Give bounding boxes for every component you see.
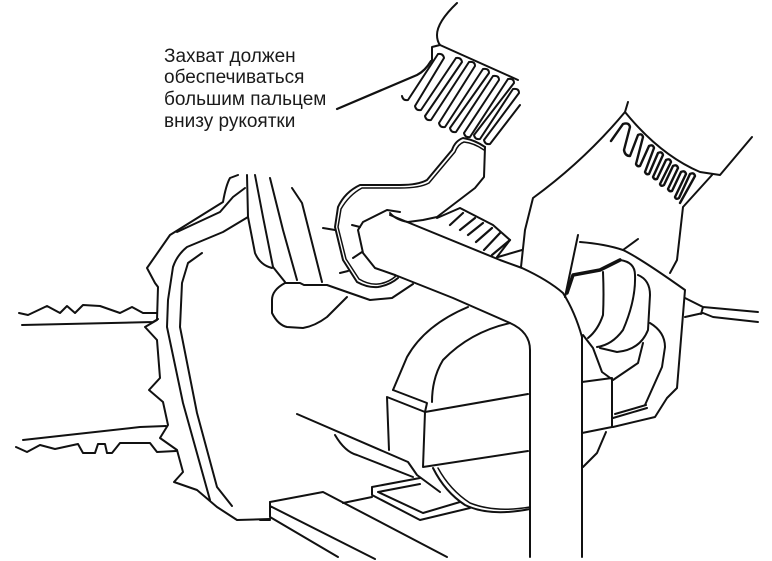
handle tube [390,215,582,557]
knob behind handle [437,208,522,257]
motor cylinder [297,307,612,512]
cuff ribbing [402,54,520,144]
thumb and left glove wrapping handle [323,138,485,287]
saw bars at left [16,305,176,453]
fingers strap [247,175,413,328]
annotation text [164,46,326,132]
annotation text: большим пальцем [164,89,326,110]
leader line [337,61,431,109]
right cuff ribbing [611,123,695,203]
annotation text: внизу рукоятки [164,111,295,132]
upper left sleeve [402,3,520,144]
base plates [260,478,470,559]
right sleeve [521,102,752,273]
glove body left [145,175,270,520]
right hand fingers [565,235,758,427]
annotation text: обеспечиваться [164,67,304,88]
annotation text: Захват должен [164,46,296,67]
